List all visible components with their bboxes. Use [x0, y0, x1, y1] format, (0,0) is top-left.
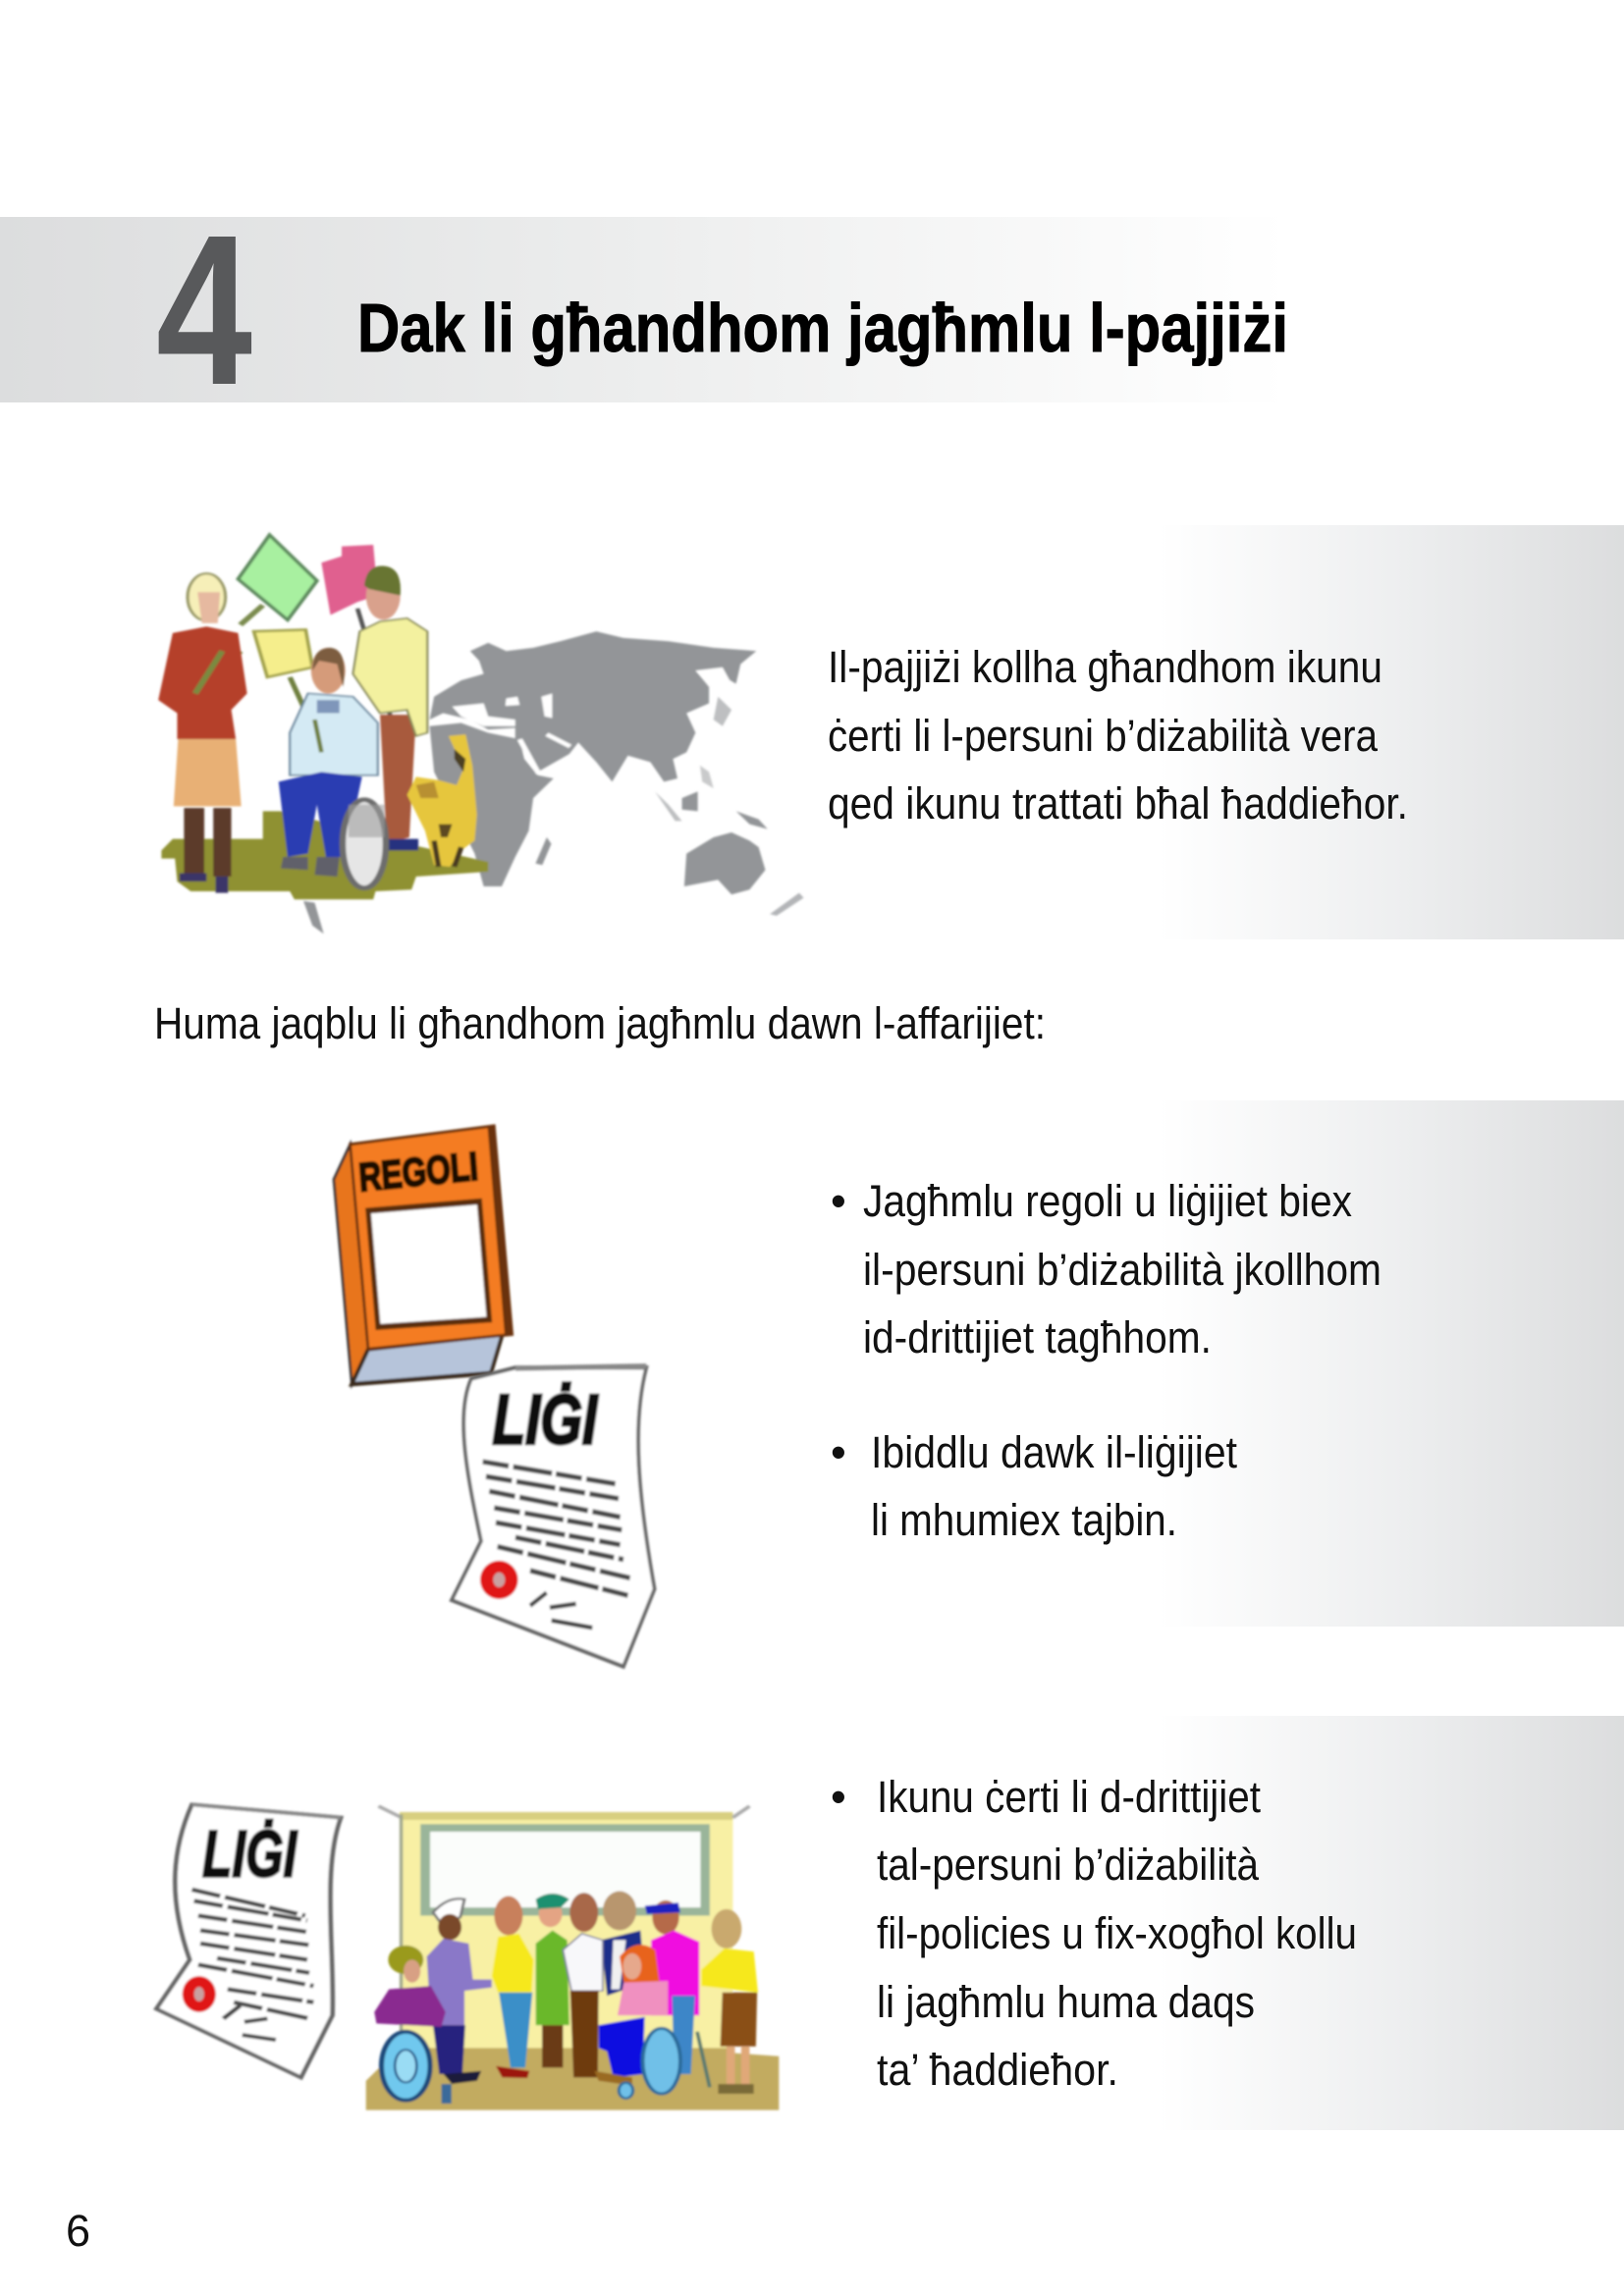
room: [400, 1814, 732, 2050]
bullet text: policies and work: •: [831, 1772, 846, 1822]
lead sentence: Huma jaqblu li għandhom jagħmlu dawn l-affarijiet:: [154, 998, 1046, 1048]
bullet text: rules and laws: •: [831, 1427, 846, 1477]
wheelchair user left: [388, 1946, 423, 1974]
illustration: protesters and world map: [158, 535, 804, 934]
law title: LIĠI: [202, 1818, 298, 1891]
ground: [161, 811, 488, 899]
woman: [188, 573, 226, 620]
dog: [407, 734, 477, 867]
illustration: law document: [452, 1366, 655, 1667]
section number: 4: [156, 191, 252, 430]
book label: REGOLI: [357, 1145, 480, 1201]
intro text: Il-pajjiżi kollha għandhom ikunu: [828, 642, 1382, 692]
panel: gradient intro: [1159, 525, 1624, 939]
bullet text: policies and work: ta’ ħaddieħor.: [877, 2045, 1118, 2095]
bullet text: policies and work: fil-policies u fix-xogħol kollu: [877, 1908, 1357, 1958]
standing man: [380, 715, 416, 844]
panel: gradient rules: [1159, 1100, 1624, 1627]
right woman: [712, 1909, 741, 1949]
turban man: [433, 1898, 464, 1924]
bullet text: rules and laws: [831, 1176, 1381, 1545]
bullet text: policies and work: [831, 1772, 1357, 2095]
white shirt man: [569, 1893, 598, 1932]
yellow shirt man: [494, 1896, 522, 1936]
illustration: law document small: [156, 1804, 341, 2077]
green person: [539, 1901, 563, 1927]
magenta man: [652, 1900, 679, 1935]
wheelchair man: [290, 693, 378, 775]
wheelchair user right: [620, 1945, 660, 1983]
bullet text: rules and laws: id-drittijiet tagħhom.: [863, 1312, 1212, 1362]
title: Dak li għandhom jagħmlu l-pajjiżi: [357, 290, 1288, 366]
bullet text: rules and laws: il-persuni b’diżabilità jkollhom: [863, 1245, 1381, 1295]
grey-haired man: [603, 1892, 636, 1931]
page number: 6: [66, 2206, 90, 2256]
illustration: rule book: [334, 1126, 513, 1384]
bullet text: policies and work: tal-persuni b’diżabilità: [877, 1840, 1260, 1890]
bullet text: policies and work: li jagħmlu huma daqs: [877, 1977, 1255, 2027]
intro text: qed ikunu trattati bħal ħaddieħor.: [828, 778, 1408, 828]
world map: [303, 631, 804, 934]
header band: [0, 191, 1288, 430]
intro text: ċerti li l-persuni b’diżabilità vera: [828, 711, 1379, 761]
bullet text: policies and work: Ikunu ċerti li d-drittijiet: [877, 1772, 1261, 1822]
intro text: [828, 642, 1408, 828]
bullet text: rules and laws: Ibiddlu dawk il-liġijiet: [871, 1427, 1237, 1477]
panel: gradient policies: [1159, 1716, 1624, 2130]
bullet text: rules and laws: Jagħmlu regoli u liġijiet biex: [863, 1176, 1352, 1226]
signs: [241, 606, 263, 625]
law title: LIĠI: [493, 1381, 598, 1459]
bullet text: rules and laws: li mhumiex tajbin.: [871, 1495, 1177, 1545]
illustration: group of diverse workers: [366, 1806, 779, 2110]
bullet text: rules and laws: •: [831, 1176, 846, 1226]
